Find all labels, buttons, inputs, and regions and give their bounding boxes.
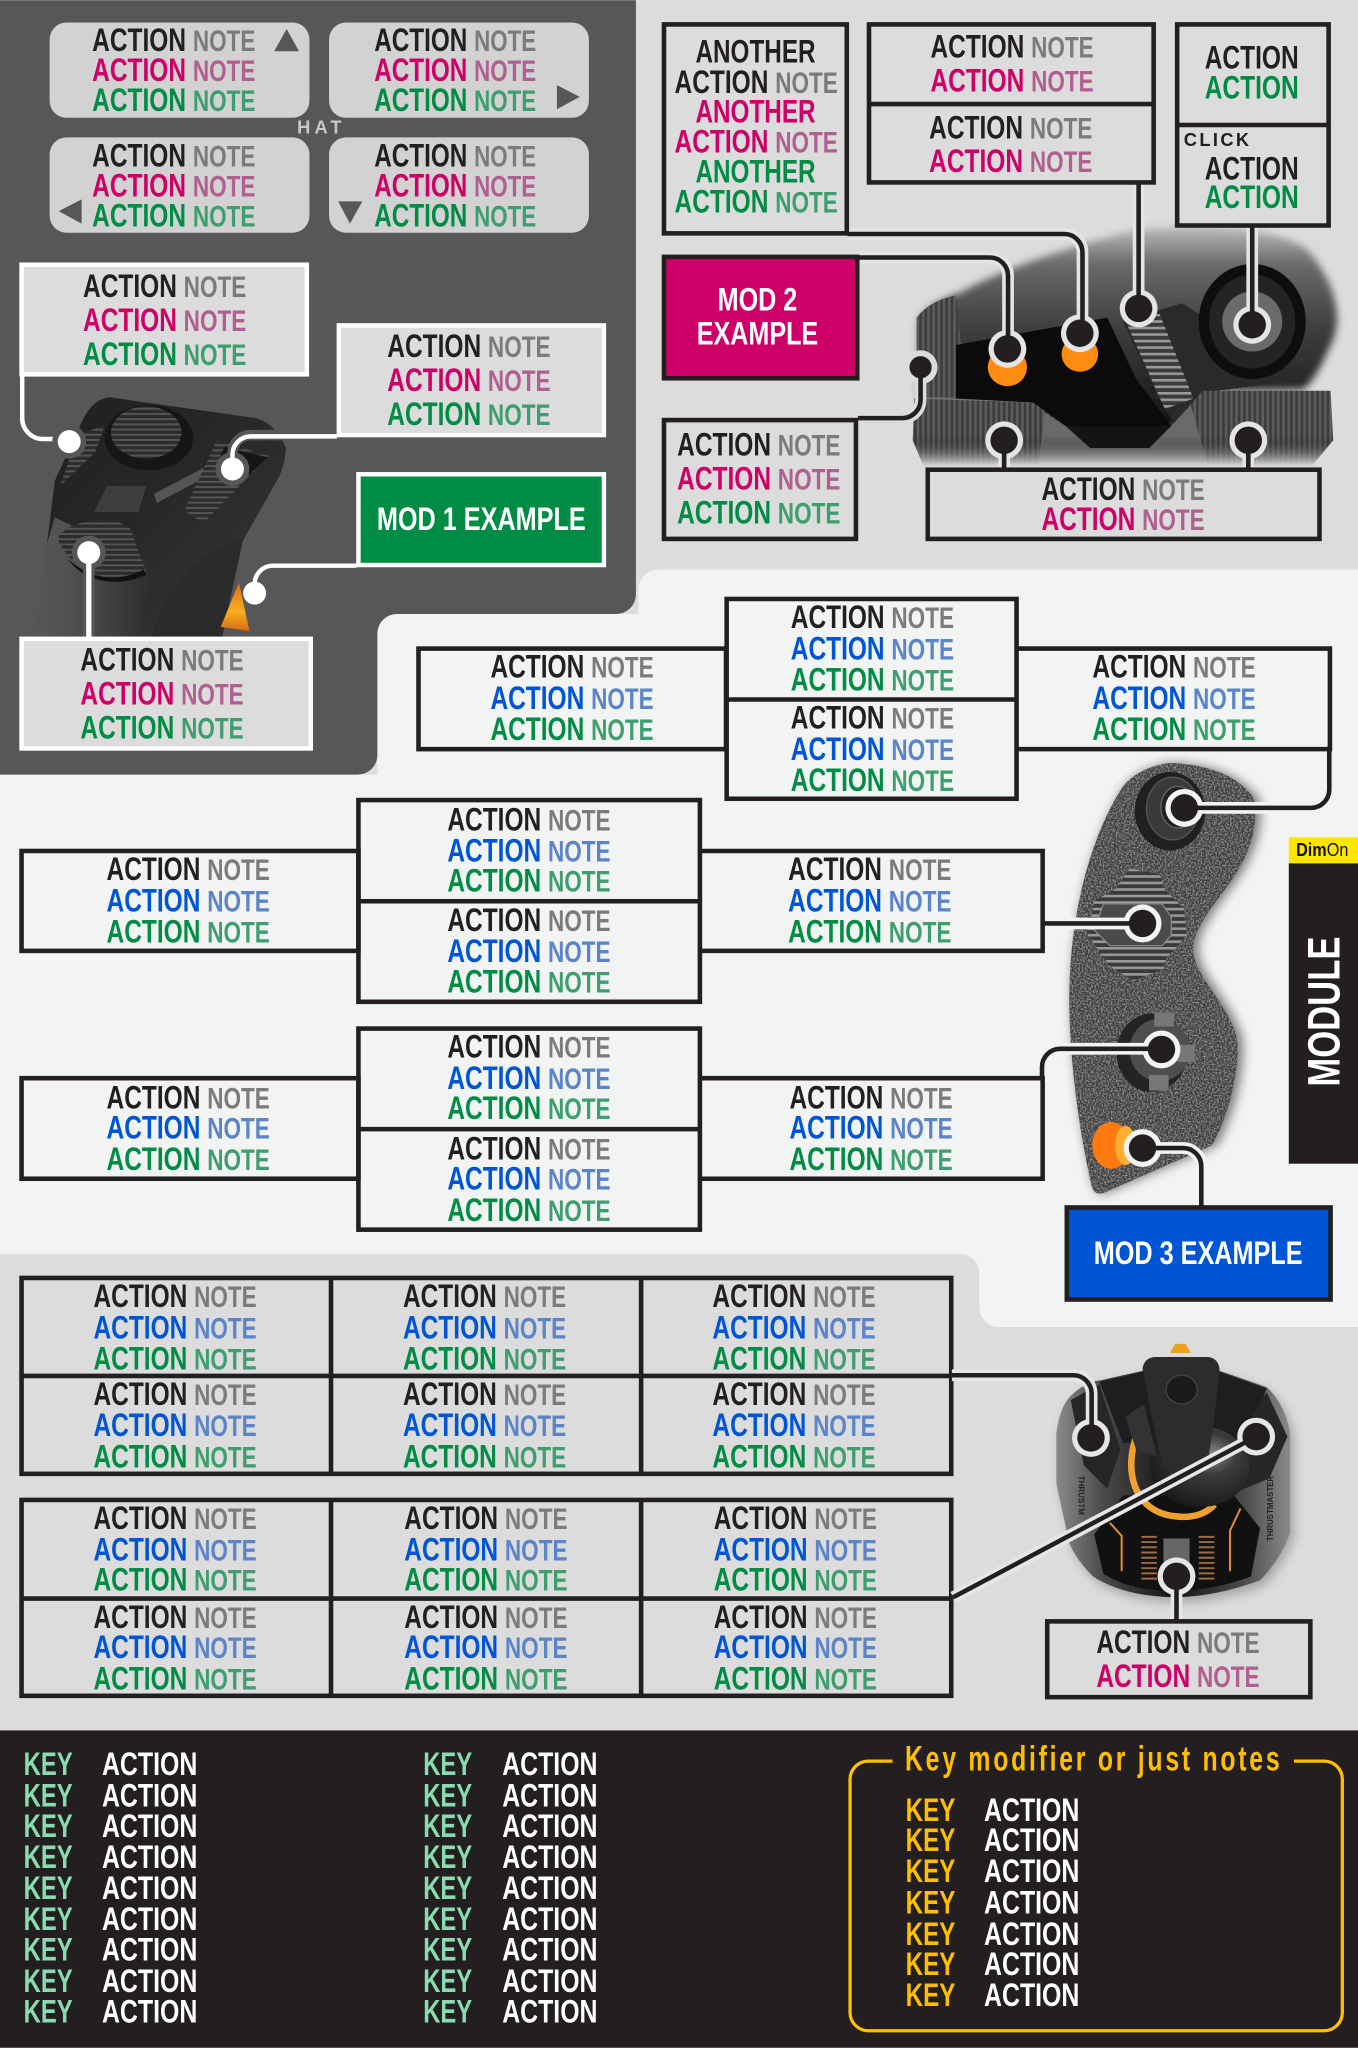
panel: row A right [1017, 648, 1330, 749]
panel: hat directions [50, 21, 589, 233]
hat up box: ACTION NOTE [92, 81, 255, 118]
callout: mod 3: MOD 3 EXAMPLE [1094, 1234, 1303, 1271]
device: module plate [1069, 763, 1260, 1194]
panel: top right two-row box: ACTION NOTE [930, 61, 1094, 98]
device: joystick on base: THRUSTM [1077, 1476, 1086, 1515]
panel: key modifier notes: KEY [906, 1945, 955, 1982]
callout: mod 2: MOD 2 [718, 281, 797, 318]
callout: mod 3 [1067, 1207, 1331, 1300]
panel: rail box: ACTION NOTE [1041, 500, 1205, 537]
panel: row B right: ACTION NOTE [788, 913, 951, 950]
panel: lower left box: ACTION NOTE [677, 426, 840, 463]
tab: DimOn module label: MODULE [1299, 937, 1350, 1087]
tab: DimOn module label [1289, 837, 1358, 1164]
key list: first column: KEY [24, 1745, 73, 1782]
hat right box: ACTION NOTE [374, 81, 536, 118]
panel: top right two-row box: ACTION NOTE [930, 27, 1094, 64]
panel: upper action grid: ACTION NOTE [712, 1308, 876, 1345]
panel: top right click box: ACTION [1205, 68, 1299, 105]
panel: lower action grid: ACTION NOTE [714, 1598, 877, 1635]
hat up box: ACTION NOTE [92, 51, 255, 88]
panel: row C centre [358, 1028, 700, 1230]
panel: lower action grid: ACTION NOTE [404, 1628, 567, 1665]
key list: first column: KEY [24, 1776, 73, 1813]
panel: joystick base box [1047, 1621, 1310, 1697]
panel: key modifier notes: KEY [906, 1976, 955, 2013]
panel: row B left [22, 850, 358, 951]
panel: row A right: ACTION NOTE [1092, 648, 1256, 685]
panel: row B left: ACTION NOTE [107, 850, 270, 887]
hat down box [329, 136, 589, 233]
panel: lower action grid: ACTION NOTE [93, 1660, 257, 1697]
panel: left box C [22, 639, 311, 748]
key list: first column: KEY [24, 1807, 73, 1844]
panel: top right box another [664, 24, 847, 233]
panel: row A centre: ACTION NOTE [791, 598, 954, 635]
panel: upper action grid: ACTION NOTE [712, 1375, 876, 1412]
panel: row C centre: ACTION NOTE [447, 1191, 611, 1228]
panel: top right click box: ACTION [1205, 38, 1299, 75]
panel: key modifier notes: ACTION [984, 1821, 1079, 1858]
panel: row C left: ACTION NOTE [107, 1078, 270, 1115]
panel: rail box [928, 470, 1319, 539]
panel: upper action grid: ACTION NOTE [93, 1438, 257, 1475]
panel: key modifier notes: ACTION [984, 1976, 1079, 2013]
panel: row A left [418, 648, 726, 749]
key list: first column: KEY [24, 1869, 73, 1906]
panel: row C centre: ACTION NOTE [447, 1028, 611, 1065]
key list: second column: KEY [423, 1869, 472, 1906]
panel: key modifier notes: ACTION [984, 1945, 1079, 1982]
key list: first column [24, 1745, 197, 2030]
panel: lower action grid: ACTION NOTE [404, 1560, 567, 1597]
panel: row C right: ACTION NOTE [789, 1109, 953, 1146]
hat down box: ACTION NOTE [374, 136, 536, 173]
panel: row A left: ACTION NOTE [490, 679, 654, 716]
panel: upper action grid: ACTION NOTE [403, 1308, 566, 1345]
key list: first column: ACTION [102, 1869, 197, 1906]
panel: key modifier notes: KEY [906, 1791, 955, 1828]
key list: first column: ACTION [102, 1807, 197, 1844]
panel: upper action grid: ACTION NOTE [712, 1406, 876, 1443]
key list: first column: ACTION [102, 1930, 197, 1967]
key list: first column: KEY [24, 1900, 73, 1937]
panel: key modifier notes: ACTION [984, 1915, 1079, 1952]
panel: lower left box: ACTION NOTE [677, 460, 840, 497]
panel: row B right: ACTION NOTE [788, 850, 951, 887]
key list: first column: ACTION [102, 1745, 197, 1782]
key list: first column: KEY [24, 1993, 73, 2030]
panel: row C centre: ACTION NOTE [447, 1159, 611, 1196]
panel: top right click box: ACTION [1205, 178, 1299, 215]
panel: key modifier notes: KEY [906, 1883, 955, 1920]
key list: second column: KEY [423, 1745, 472, 1782]
key list: second column: KEY [423, 1962, 472, 1999]
hat down box: ACTION NOTE [374, 196, 536, 233]
panel: lower action grid: ACTION NOTE [714, 1530, 877, 1567]
panel: row A right: ACTION NOTE [1092, 710, 1256, 747]
panel: row C centre: ACTION NOTE [447, 1059, 611, 1096]
key list: second column: ACTION [502, 1745, 598, 1782]
panel: row B centre: ACTION NOTE [447, 901, 611, 938]
panel: key modifier notes: KEY [906, 1821, 955, 1858]
panel: upper action grid: ACTION NOTE [403, 1438, 566, 1475]
panel: top right box another: ANOTHER [695, 93, 816, 130]
panel: upper action grid: ACTION NOTE [93, 1406, 257, 1443]
hat right box: ACTION NOTE [374, 51, 536, 88]
panel: dark footer background [0, 1730, 1358, 2048]
panel: left box A: ACTION NOTE [83, 301, 246, 338]
key list: second column: KEY [423, 1900, 472, 1937]
device: throttle base [913, 227, 1337, 465]
key list: first column: ACTION [102, 1962, 197, 1999]
panel: row B centre: ACTION NOTE [447, 862, 611, 899]
panel: left box B: ACTION NOTE [387, 361, 551, 398]
panel: row A left: ACTION NOTE [490, 710, 654, 747]
panel: row C left: ACTION NOTE [107, 1109, 270, 1146]
device: joystick grip [37, 397, 286, 637]
panel: top right box another: ANOTHER [695, 33, 816, 70]
leaders: top left white lines [22, 375, 356, 637]
panel: left box A: ACTION NOTE [83, 335, 246, 372]
panel: lower left box: ACTION NOTE [677, 493, 840, 530]
key list: second column [423, 1745, 598, 2030]
panel: row B right [700, 850, 1043, 951]
panel: row A left: ACTION NOTE [490, 648, 654, 685]
panel: top right box another: ACTION NOTE [675, 63, 838, 100]
panel: lower action grid: ACTION NOTE [93, 1530, 257, 1567]
panel: row B left: ACTION NOTE [107, 913, 270, 950]
panel: lower action grid: ACTION NOTE [714, 1660, 877, 1697]
hat up box [50, 21, 309, 118]
panel: upper action grid: ACTION NOTE [403, 1277, 566, 1314]
device: joystick on base [1056, 1344, 1294, 1602]
leaders: throttle base [847, 183, 1271, 469]
panel: upper action grid: ACTION NOTE [712, 1340, 876, 1377]
panel: row C right [700, 1078, 1043, 1179]
panel: row C right: ACTION NOTE [789, 1078, 953, 1115]
panel: left box B [339, 325, 604, 435]
leaders: joystick base [952, 1375, 1275, 1621]
hat left box: ACTION NOTE [92, 196, 255, 233]
panel: lower action grid: ACTION NOTE [93, 1628, 257, 1665]
panel: row C centre: ACTION NOTE [447, 1129, 611, 1166]
panel: upper action grid: ACTION NOTE [93, 1340, 257, 1377]
panel: key modifier notes: ACTION [984, 1883, 1079, 1920]
panel: upper action grid: ACTION NOTE [403, 1375, 566, 1412]
panel: row C right: ACTION NOTE [789, 1140, 953, 1177]
panel: upper action grid [21, 1277, 952, 1475]
hat down box: ACTION NOTE [374, 166, 536, 203]
panel: dark top left background [0, 0, 636, 775]
hat right box: ACTION NOTE [374, 21, 536, 58]
panel: lower action grid: ACTION NOTE [93, 1598, 257, 1635]
panel: lower action grid: ACTION NOTE [404, 1499, 567, 1536]
hat right box [329, 21, 589, 118]
hat left box: ACTION NOTE [92, 166, 255, 203]
panel: lower action grid: ACTION NOTE [404, 1598, 567, 1635]
panel: lower action grid: ACTION NOTE [714, 1560, 877, 1597]
panel: row A centre: ACTION NOTE [791, 730, 954, 767]
key list: second column: KEY [423, 1993, 472, 2030]
key list: second column: KEY [423, 1807, 472, 1844]
key list: second column: KEY [423, 1930, 472, 1967]
panel: light middle background [0, 570, 1358, 1327]
panel: left box C: ACTION NOTE [80, 674, 244, 711]
panel: left box B: ACTION NOTE [387, 395, 551, 432]
panel: row B centre [358, 800, 700, 1002]
panel: top right box another: ACTION NOTE [675, 123, 838, 160]
panel: lower left box [664, 420, 856, 539]
panel: top right two-row box [868, 24, 1154, 182]
key list: first column: ACTION [102, 1900, 197, 1937]
callout: mod 1 [358, 474, 604, 565]
panel: upper action grid: ACTION NOTE [403, 1406, 566, 1443]
panel: row C left: ACTION NOTE [107, 1140, 270, 1177]
panel: row A centre [726, 598, 1017, 799]
panel: key modifier notes [850, 1740, 1342, 2031]
panel: row B centre: ACTION NOTE [447, 932, 611, 969]
panel: row B centre: ACTION NOTE [447, 832, 611, 869]
panel: row B centre: ACTION NOTE [447, 962, 611, 999]
panel: row A right: ACTION NOTE [1092, 679, 1256, 716]
key list: first column: KEY [24, 1930, 73, 1967]
hat left box: ACTION NOTE [92, 136, 255, 173]
panel: top right click box: ACTION [1205, 149, 1299, 186]
key list: second column: ACTION [502, 1962, 598, 1999]
key list: first column: ACTION [102, 1776, 197, 1813]
panel: row A centre: ACTION NOTE [791, 699, 954, 736]
panel: upper action grid: ACTION NOTE [93, 1308, 257, 1345]
panel: key modifier notes: ACTION [984, 1852, 1079, 1889]
key list: second column: ACTION [502, 1993, 598, 2030]
panel: top right two-row box: ACTION NOTE [929, 108, 1092, 145]
device: joystick on base: THRUSTMASTER [1266, 1475, 1275, 1541]
hat left box [50, 136, 309, 233]
panel: left box C: ACTION NOTE [80, 708, 244, 745]
key list: second column: ACTION [502, 1776, 598, 1813]
panel: lower action grid: ACTION NOTE [714, 1499, 877, 1536]
panel: top right click box: CLICK [1184, 129, 1250, 150]
panel: rail box: ACTION NOTE [1041, 470, 1205, 507]
panel: key modifier notes: ACTION [984, 1791, 1079, 1828]
panel: key modifier notes: KEY [906, 1915, 955, 1952]
key list: first column: KEY [24, 1838, 73, 1875]
key list: second column: ACTION [502, 1930, 598, 1967]
panel: lower action grid: ACTION NOTE [93, 1560, 257, 1597]
key list: second column: ACTION [502, 1807, 598, 1844]
callout: mod 2 [664, 257, 857, 378]
panel: upper action grid: ACTION NOTE [403, 1340, 566, 1377]
key list: first column: ACTION [102, 1993, 197, 2030]
hat up box: ACTION NOTE [92, 21, 255, 58]
panel: joystick base box: ACTION NOTE [1096, 1657, 1260, 1694]
panel: left box A: ACTION NOTE [83, 267, 246, 304]
key list: second column: ACTION [502, 1869, 598, 1906]
panel: left box A [22, 265, 307, 374]
key list: second column: ACTION [502, 1838, 598, 1875]
key list: second column: KEY [423, 1776, 472, 1813]
tab: DimOn module label: DimOn [1296, 839, 1348, 860]
panel: top right box another: ACTION NOTE [675, 183, 838, 220]
panel: upper action grid: ACTION NOTE [712, 1438, 876, 1475]
panel: upper action grid: ACTION NOTE [93, 1375, 257, 1412]
callout: mod 2: EXAMPLE [697, 315, 818, 352]
panel: lower action grid: ACTION NOTE [93, 1499, 257, 1536]
panel: lower action grid [21, 1499, 952, 1697]
leaders: module plate [1042, 750, 1329, 1208]
panel: left box B: ACTION NOTE [387, 327, 551, 364]
panel: lower action grid: ACTION NOTE [404, 1660, 567, 1697]
key list: first column: KEY [24, 1962, 73, 1999]
panel: lower action grid: ACTION NOTE [714, 1628, 877, 1665]
panel: lower action grid: ACTION NOTE [404, 1530, 567, 1567]
panel: row B centre: ACTION NOTE [447, 800, 611, 837]
panel: row A centre: ACTION NOTE [791, 629, 954, 666]
panel: row C left [22, 1078, 358, 1179]
panel: row C centre: ACTION NOTE [447, 1089, 611, 1126]
panel: top right two-row box: ACTION NOTE [929, 142, 1092, 179]
panel: upper action grid: ACTION NOTE [93, 1277, 257, 1314]
panel: upper action grid: ACTION NOTE [712, 1277, 876, 1314]
key list: second column: ACTION [502, 1900, 598, 1937]
panel: row B left: ACTION NOTE [107, 881, 270, 918]
panel: row B right: ACTION NOTE [788, 881, 951, 918]
panel: key modifier notes: KEY [906, 1852, 955, 1889]
panel: top right click box [1176, 24, 1329, 226]
panel: joystick base box: ACTION NOTE [1096, 1623, 1260, 1660]
callout: mod 1: MOD 1 EXAMPLE [377, 500, 586, 537]
panel: top right box another: ANOTHER [695, 153, 816, 190]
panel: row A centre: ACTION NOTE [791, 661, 954, 698]
key list: first column: ACTION [102, 1838, 197, 1875]
key list: second column: KEY [423, 1838, 472, 1875]
panel: left box C: ACTION NOTE [80, 640, 244, 677]
panel: row A centre: ACTION NOTE [791, 761, 954, 798]
hat label: HAT [297, 117, 342, 138]
